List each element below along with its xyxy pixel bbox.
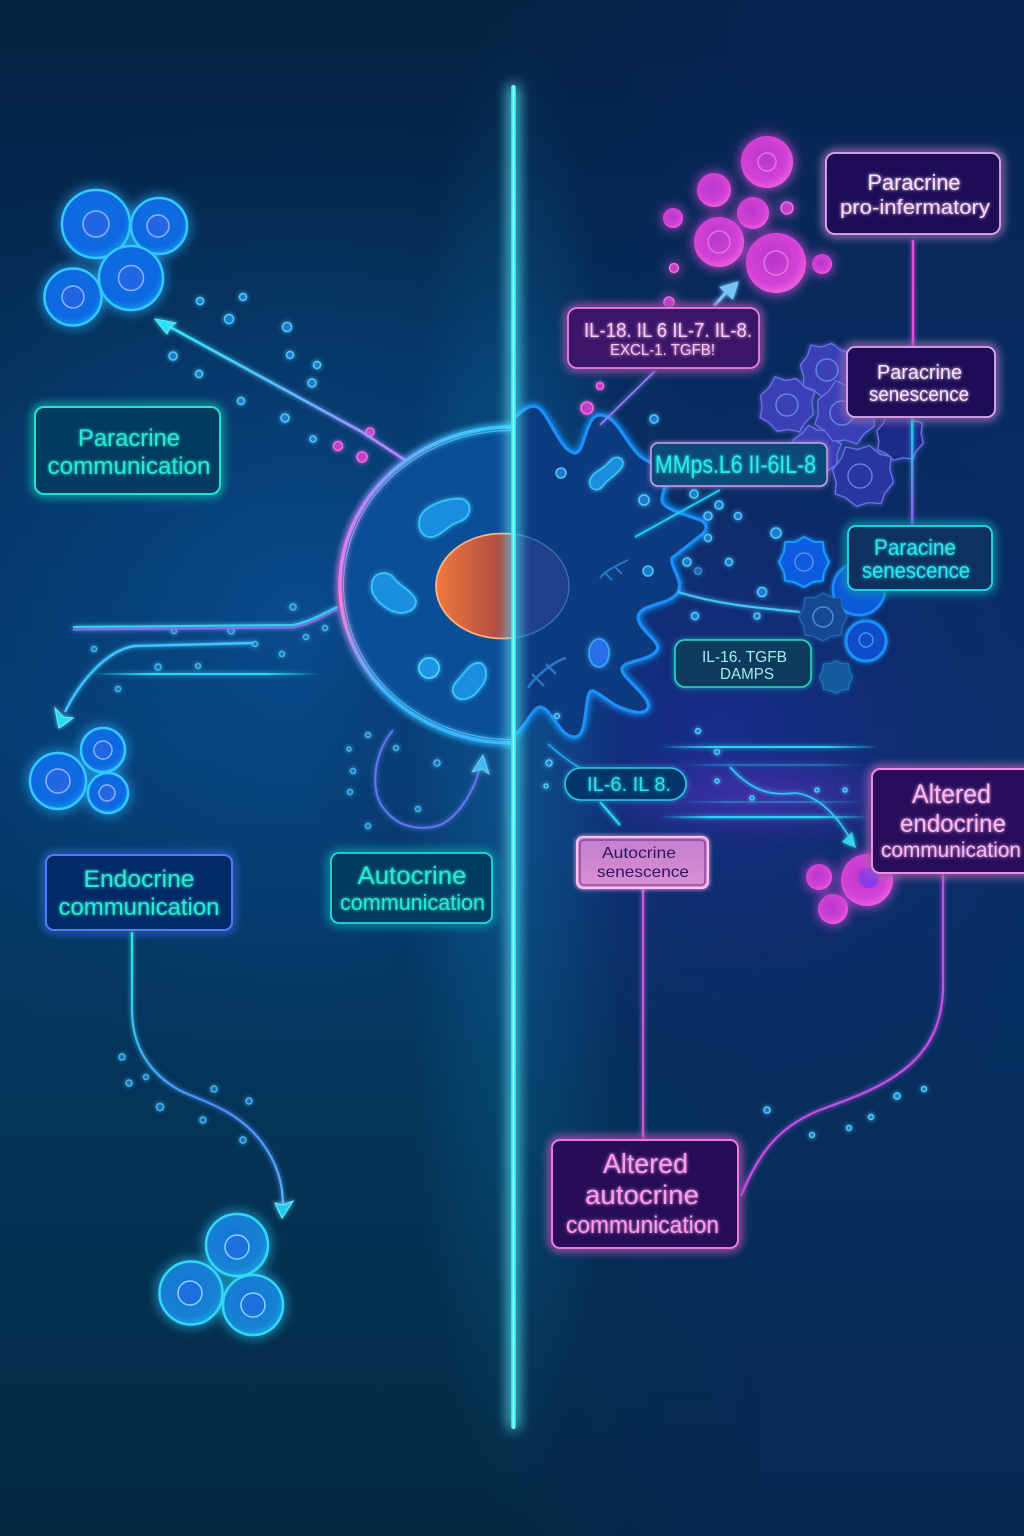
label: endocrine communication: communication <box>58 894 220 921</box>
nucleus: split orange and blue <box>435 533 569 639</box>
central divider line <box>511 85 516 1429</box>
label: cytokine list: EXCL-1. TGFB! <box>610 342 715 359</box>
label: paracrine senescence: Paracrine <box>877 361 962 384</box>
icon: organelle left <box>372 573 416 613</box>
label: altered endocrine communication: Altered <box>912 779 991 809</box>
label: altered autocrine communication: communication <box>566 1212 719 1239</box>
arrows: streaks and signal to endocrine target <box>548 744 880 848</box>
label: cytokine list: IL-18. IL 6 IL-7. IL-8. <box>584 320 752 342</box>
icon: purple senescent cell cluster <box>751 339 929 513</box>
cell: normal half <box>332 420 511 750</box>
icon: senescent vesicle <box>589 639 609 667</box>
particles: left endocrine and autocrine fields <box>92 604 440 1143</box>
label: paracine senescence: senescence <box>862 558 970 583</box>
label: paracrine pro-inflammatory <box>826 153 1000 234</box>
label: paracrine communication: Paracrine <box>78 425 180 452</box>
particles: right secretory field <box>544 382 926 1138</box>
icon: blue senescent cell cluster <box>779 537 886 694</box>
label: autocrine senescence: senescence <box>597 864 689 881</box>
label: paracrine pro-inflammatory: Paracrine <box>868 170 960 195</box>
icon: pink target cells <box>806 854 893 924</box>
label: paracine senescence <box>848 526 992 590</box>
label: IL-16 TGFB DAMPS <box>675 640 811 687</box>
label: endocrine communication: Endocrine <box>84 866 194 893</box>
arrow: paracrine signal to upper-left cells <box>155 319 405 460</box>
icon: lower cell cluster <box>160 1214 283 1335</box>
label: autocrine communication: communication <box>340 890 485 915</box>
label: altered autocrine communication: Altered <box>603 1148 688 1179</box>
icon: upper-left cell cluster <box>44 190 187 326</box>
label: IL-6 IL-8 <box>565 768 686 800</box>
label: altered endocrine communication: endocrine <box>900 810 1006 838</box>
label: MMPs list: MMps.L6 II-6IL-8 <box>655 451 816 479</box>
icon: organelle upper <box>419 499 469 537</box>
connector: autocrine senescence to altered autocrine <box>642 888 644 1140</box>
label: altered autocrine communication: autocrine <box>585 1180 699 1210</box>
arrows: endocrine signal lines from the normal cell <box>55 607 337 728</box>
arrow: endocrine route to lower cells <box>132 932 293 1218</box>
label: autocrine communication: Autocrine <box>358 862 466 890</box>
label: paracrine senescence: senescence <box>869 384 969 406</box>
label: autocrine senescence: Autocrine <box>602 845 676 862</box>
label: IL-16 TGFB DAMPS: IL-16. TGFB <box>702 649 787 666</box>
label: IL-6 IL-8: IL-6. IL 8. <box>587 774 671 796</box>
icon: fragmented structure upper <box>600 560 628 580</box>
label: autocrine senescence <box>577 837 708 888</box>
label: cytokine list <box>568 308 759 368</box>
label: paracrine pro-inflammatory: pro-infermatory <box>840 197 990 219</box>
label: paracine senescence: Paracine <box>874 535 956 560</box>
arrow: autocrine loop <box>375 730 489 828</box>
icon: fragmented structure lower <box>528 658 566 688</box>
particles: left paracrine field <box>169 294 374 462</box>
label: autocrine communication <box>331 853 492 923</box>
arrows: secretion streaks from senescent cell <box>635 490 800 612</box>
connector: paracrine pro-inflammatory to senescence <box>911 240 913 526</box>
label: paracrine communication <box>35 407 220 494</box>
icon: organelle lower <box>453 663 486 699</box>
label: endocrine communication <box>46 855 232 930</box>
connector: altered endocrine to altered autocrine <box>741 873 943 1196</box>
label: MMPs list <box>651 443 827 486</box>
icon: pink pro-inflammatory cell cluster <box>663 136 832 307</box>
cell: senescent half <box>513 406 706 737</box>
label: IL-16 TGFB DAMPS: DAMPS <box>720 666 774 683</box>
label: altered autocrine communication <box>552 1140 738 1248</box>
label: paracrine communication: communication <box>48 453 210 480</box>
label: altered endocrine communication <box>872 769 1024 873</box>
icon: senescent mitochondrion <box>590 457 623 490</box>
icon: vesicle <box>419 658 439 678</box>
icon: left-middle cell cluster <box>30 728 128 813</box>
label: altered endocrine communication: communication <box>881 839 1021 862</box>
arrow: signal to pink cells <box>600 281 739 425</box>
label: paracrine senescence <box>847 347 995 417</box>
